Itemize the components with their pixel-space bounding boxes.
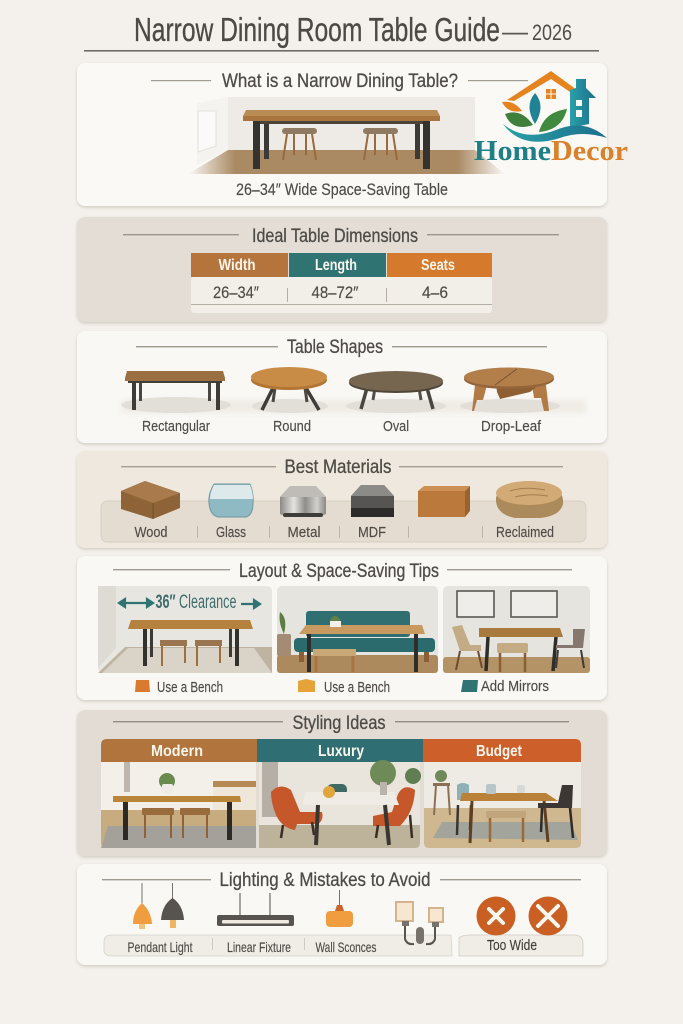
scene: 36 inch clearance: [98, 586, 272, 673]
dimensions table: [191, 253, 492, 313]
shape: oval: [346, 371, 446, 435]
logo teal house: [570, 79, 596, 128]
material: reclaimed: [496, 481, 563, 541]
style card: luxury: Luxury: [318, 743, 364, 760]
shape: round: [251, 367, 328, 435]
tip: use a bench 1: [135, 679, 223, 696]
heading: styling ideas: Styling Ideas: [292, 712, 386, 734]
title: 2026: [532, 20, 572, 45]
logo wordmark: HomeDecor: [474, 136, 628, 167]
label: linear fixture: Linear Fixture: [227, 939, 291, 955]
heading: best materials: Best Materials: [284, 456, 392, 478]
icon: orange pendant light: [133, 883, 152, 929]
label: drop-leaf: Drop-Leaf: [481, 418, 542, 435]
logo wave: [503, 124, 607, 142]
heading: what is a narrow dining table: What is a Narrow Dining Table?: [222, 70, 458, 92]
logo window: [546, 89, 556, 99]
label: pendant light: Pendant Light: [128, 939, 193, 955]
dimensions table: 26–34″: [213, 284, 259, 302]
materials shelf: [101, 501, 586, 542]
label: MDF: MDF: [358, 524, 386, 541]
icon: grey pendant light: [161, 883, 184, 928]
tip: add mirrors: Add Mirrors: [481, 678, 549, 695]
illustration: narrow table with stools: [188, 97, 505, 174]
heading: lighting and mistakes to avoid: Lighting & Mistakes to Avoid: [220, 869, 430, 891]
material: metal: [280, 486, 326, 541]
dimensions table: Length: [315, 257, 357, 274]
icon: linear fixture: [217, 893, 294, 926]
material: unlabelled oak block: [418, 486, 470, 517]
tip: use a bench 1: Use a Bench: [157, 679, 223, 696]
arrow: right clearance: [241, 600, 260, 608]
arrow: left clearance: [119, 599, 153, 607]
tip: use a bench 2: Use a Bench: [324, 679, 390, 696]
dimensions table: 48–72″: [312, 284, 359, 302]
mistakes band: [459, 935, 583, 956]
style card: budget: Budget: [476, 743, 522, 760]
logo window slots: [576, 100, 582, 117]
dimensions table: Seats: [421, 257, 455, 274]
panel: ideal table dimensions: [77, 217, 607, 322]
logo roof: [507, 71, 577, 101]
logo leaves: [502, 93, 567, 132]
panel: styling ideas: [77, 710, 607, 856]
icon: mistake cross 1: [476, 896, 516, 936]
shape: rectangular: [121, 371, 231, 435]
label: glass: Glass: [216, 524, 246, 541]
material: wood: [121, 481, 180, 541]
title: Narrow Dining Room Table Guide: [134, 11, 500, 48]
lighting labels band: [104, 935, 452, 956]
label: reclaimed: Reclaimed: [496, 524, 554, 541]
dimensions table: Width: [218, 257, 256, 274]
tip: use a bench 2: [298, 679, 390, 696]
material: glass: [209, 484, 253, 541]
style card: modern: [101, 739, 257, 848]
panel: layout and space-saving tips: [77, 556, 607, 700]
label: metal: Metal: [288, 524, 320, 541]
caption: width note: 26–34″ Wide Space-Saving Table: [236, 181, 448, 199]
label: wood: Wood: [134, 524, 168, 541]
heading: ideal table dimensions: Ideal Table Dimensions: [252, 225, 418, 247]
label: round: Round: [273, 418, 311, 435]
panel: lighting and mistakes to avoid: [77, 864, 607, 965]
shape: drop-leaf: [460, 368, 560, 435]
icon: wall sconces: [396, 902, 443, 944]
title: —: [502, 16, 528, 46]
logo: HomeDecor: [474, 71, 628, 167]
scene: banquette bench: [277, 586, 438, 673]
panel: table shapes: [77, 331, 607, 443]
label: 36 inch clearance: 36″ Clearance: [156, 592, 236, 613]
heading: layout and space-saving tips: Layout & Space-Saving Tips: [239, 560, 439, 582]
style card: modern: Modern: [151, 743, 203, 760]
panel: best materials: [77, 451, 607, 548]
panel: what is a narrow dining table: [77, 63, 607, 206]
material: MDF: [351, 485, 394, 541]
heading: table shapes: Table Shapes: [287, 336, 383, 358]
style card: budget: [423, 739, 581, 848]
label: rectangular: Rectangular: [142, 418, 210, 435]
dimensions table: 4–6: [422, 284, 448, 302]
icon: mistake cross 2: [528, 896, 568, 936]
label: too wide: Too Wide: [487, 937, 537, 954]
icon: orange pendant lamp: [326, 890, 353, 927]
label: wall sconces: Wall Sconces: [316, 939, 376, 955]
label: oval: Oval: [383, 418, 409, 435]
style card: luxury: [257, 739, 423, 848]
scene: mirrors: [443, 586, 590, 673]
tip: add mirrors: [461, 678, 549, 695]
